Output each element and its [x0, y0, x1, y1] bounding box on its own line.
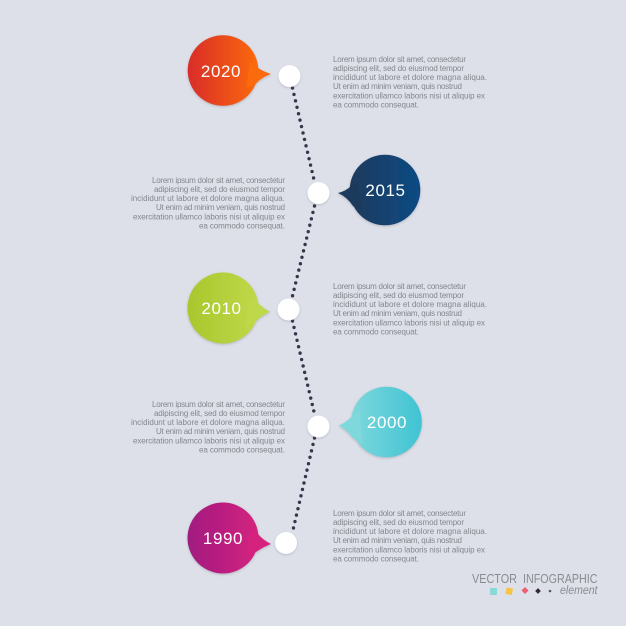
dotted timeline [292, 88, 314, 530]
text block: 2010: incididunt ut labore et dolore magna aliqua. [333, 300, 487, 309]
text block: 1990: Ut enim ad minim veniam, quis nostrud [333, 536, 462, 545]
text block: 2020: exercitation ullamco laboris nisi ut aliquip ex [333, 92, 485, 100]
text block: 2010: Lorem ipsum dolor sit amet, consectetur [333, 282, 466, 291]
text block: 2020: Lorem ipsum dolor sit amet, consectetur [333, 55, 466, 64]
text block: 1990: Lorem ipsum dolor sit amet, consectetur [333, 509, 466, 518]
text block: 2015: exercitation ullamco laboris nisi ut aliquip ex [133, 212, 285, 222]
text block: 2000: exercitation ullamco laboris nisi ut aliquip ex [133, 436, 285, 446]
text block: 2000 [131, 400, 285, 454]
bubble: 2010: 2010 [201, 299, 242, 318]
text block: 2015: ea commodo consequat. [199, 222, 285, 230]
bubble: 1990: 1990 [203, 529, 243, 548]
text block: 2000: Ut enim ad minim veniam, quis nostrud [156, 427, 285, 436]
text block: 2020 [333, 55, 487, 110]
text block: 2015: incididunt ut labore et dolore magna aliqua. [131, 194, 285, 203]
text block: 2015: adipiscing elit, sed do eiusmod tempor [154, 185, 285, 194]
text block: 2000: incididunt ut labore et dolore magna aliqua. [131, 418, 285, 427]
bubble: 2010 [188, 272, 270, 344]
text block: 1990 [333, 509, 487, 564]
timeline nodes [275, 65, 330, 554]
text block: 2020: Ut enim ad minim veniam, quis nostrud [333, 82, 462, 91]
text block: 2000: adipiscing elit, sed do eiusmod tempor [154, 409, 285, 418]
footer label: INFOGRAPHIC [523, 571, 598, 586]
bubble: 1990 [188, 502, 271, 574]
text block: 2015 [131, 176, 285, 230]
text block: 2010: exercitation ullamco laboris nisi ut aliquip ex [333, 318, 485, 328]
text block: 2020: adipiscing elit, sed do eiusmod tempor [333, 64, 464, 73]
bubble: 2000 [339, 387, 422, 457]
text block: 1990: exercitation ullamco laboris nisi ut aliquip ex [333, 546, 485, 554]
text block: 1990: adipiscing elit, sed do eiusmod tempor [333, 518, 464, 527]
text block: 2000: ea commodo consequat. [199, 446, 285, 454]
bubble: 2000: 2000 [367, 413, 407, 432]
text block: 2015: Ut enim ad minim veniam, quis nostrud [156, 203, 285, 212]
footer label: VECTOR [472, 571, 517, 586]
text block: 2010: Ut enim ad minim veniam, quis nostrud [333, 309, 462, 318]
text block: 2020: incididunt ut labore et dolore magna aliqua. [333, 73, 487, 82]
text block: 2010 [333, 282, 487, 336]
text block: 1990: ea commodo consequat. [333, 554, 419, 564]
text block: 2010: ea commodo consequat. [333, 328, 419, 336]
bubble: 2020 [188, 35, 271, 106]
footer label [472, 571, 598, 597]
bubble: 2020: 2020 [201, 62, 241, 81]
bubble: 2015 [338, 155, 420, 225]
text block: 2000: Lorem ipsum dolor sit amet, consectetur [152, 400, 285, 409]
footer label: element [560, 583, 598, 597]
text block: 2010: adipiscing elit, sed do eiusmod tempor [333, 291, 464, 300]
text block: 1990: incididunt ut labore et dolore magna aliqua. [333, 527, 487, 536]
text block: 2015: Lorem ipsum dolor sit amet, consectetur [152, 176, 285, 185]
bubble: 2015: 2015 [365, 181, 406, 200]
text block: 2020: ea commodo consequat. [333, 100, 419, 110]
